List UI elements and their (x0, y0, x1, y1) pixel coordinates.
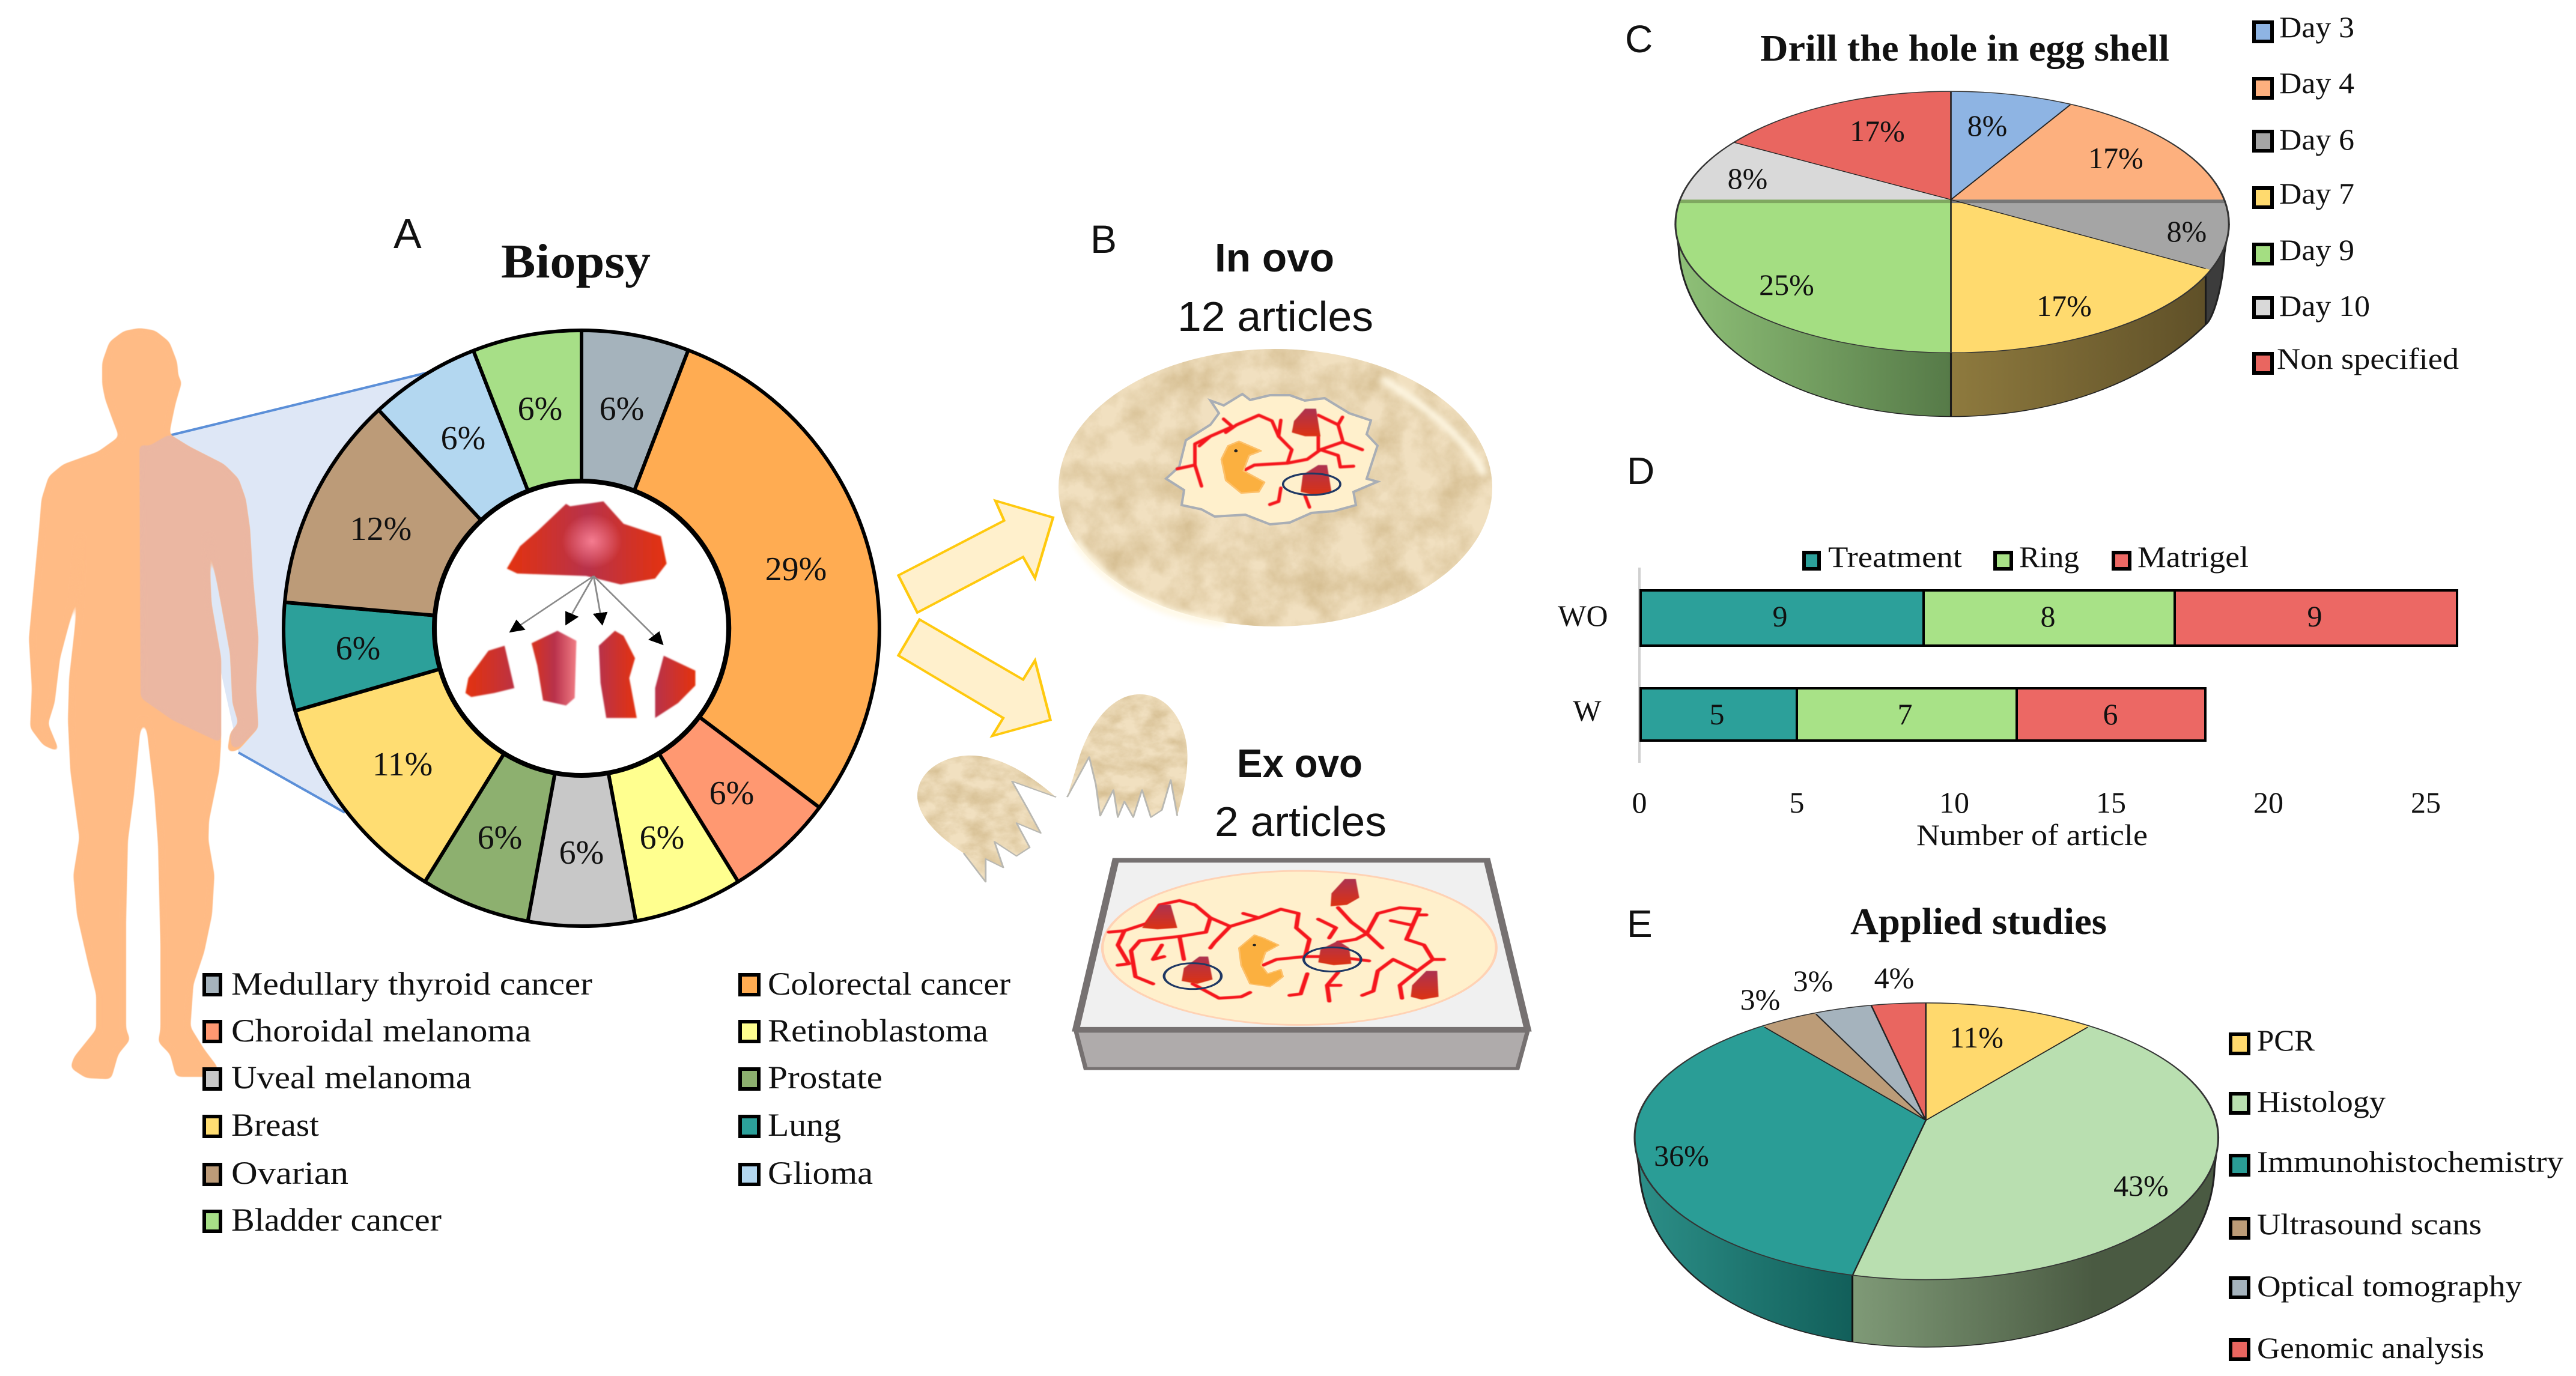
legend: drilling day: Day 9 (2279, 233, 2354, 267)
x axis tick labels: 5 (1789, 786, 1805, 819)
embryo (1239, 935, 1283, 987)
legend: tumour types: Breast (231, 1107, 319, 1143)
heading: Applied studies: Applied studies (1850, 902, 2107, 942)
legend: treatment, ring, matrigel: Ring (2019, 540, 2079, 574)
icon: human silhouette (29, 328, 258, 1079)
panel letter E: E (1627, 902, 1653, 945)
heading: In ovo: In ovo (1215, 235, 1334, 280)
pie percentage labels: 36% (1654, 1139, 1709, 1172)
icon: ex ovo culture dish (1076, 860, 1528, 1068)
legend: drilling day: Day 6 (2279, 123, 2354, 156)
donut percentage labels: 6% (518, 390, 562, 428)
legend: drilling day: Non specified (2277, 342, 2459, 375)
x axis tick labels: 10 (1939, 786, 1969, 819)
legend: tumour types: Ovarian (231, 1155, 348, 1191)
legend: tumour types: Medullary thyroid cancer (231, 966, 592, 1002)
icon: tumour divided into fragments (466, 502, 695, 718)
pie percentage labels: 25% (1759, 268, 1814, 302)
panel B: in ovo and ex ovo models (898, 217, 1528, 1068)
legend: treatment, ring, matrigel (1804, 540, 2249, 574)
bar value labels (1710, 599, 2322, 731)
egg rim highlight (1075, 378, 1484, 622)
arrow: to in ovo (898, 501, 1053, 613)
embryo, vessels and tumours (1177, 408, 1362, 507)
panel A: biopsy (29, 210, 1010, 1238)
category labels: WO (1558, 599, 1608, 632)
vessels (1109, 900, 1444, 1001)
donut percentage labels: 29% (765, 551, 827, 588)
pie percentage labels (1654, 961, 2169, 1202)
panel letter C: C (1625, 17, 1653, 61)
panel C: drill the hole in egg shell (1623, 10, 2459, 431)
donut percentage labels: 6% (559, 834, 604, 871)
panel letter D: D (1627, 449, 1654, 493)
pie percentage labels: 3% (1740, 983, 1780, 1016)
pie percentage labels: 17% (2037, 289, 2092, 323)
donut percentage labels: 6% (336, 630, 380, 667)
bar value labels: 5 (1710, 697, 1724, 731)
donut percentage labels: 6% (441, 420, 485, 457)
heading: Ex ovo: Ex ovo (1237, 741, 1362, 786)
silicone rings (1164, 947, 1361, 989)
pie percentage labels: 8% (2167, 214, 2207, 248)
arrow: to ex ovo (898, 619, 1050, 736)
legend: drilling day: Day 7 (2279, 177, 2354, 210)
bar: W (1641, 688, 2205, 741)
donut percentage labels: 11% (372, 746, 433, 783)
legend: treatment, ring, matrigel: Matrigel (2137, 540, 2249, 574)
bar chart axis line (1638, 568, 1641, 763)
pie percentage labels: 3% (1793, 964, 1833, 998)
text: 12 articles: 12 articles (1177, 293, 1373, 340)
x axis tick labels (1632, 786, 2441, 819)
donut percentage labels: 6% (640, 819, 684, 856)
dish top face (1076, 860, 1528, 1029)
legend: tumour types: Choroidal melanoma (231, 1013, 531, 1049)
donut percentage labels (336, 390, 827, 871)
bar value labels: 9 (2307, 599, 2322, 633)
tumours (1142, 879, 1439, 999)
panel D: stacked bar chart (1558, 449, 2457, 852)
x axis tick labels: 15 (2096, 786, 2126, 819)
x axis tick labels: 0 (1632, 786, 1647, 819)
legend: applied studies: Optical tomography (2257, 1269, 2522, 1303)
legend: tumour types: Lung (768, 1107, 841, 1143)
category labels (1558, 599, 1608, 727)
legend: tumour types: Bladder cancer (231, 1202, 442, 1238)
pie percentage labels: 4% (1874, 961, 1914, 995)
donut percentage labels: 6% (600, 390, 644, 428)
pie percentage labels: 43% (2113, 1169, 2169, 1202)
panel letter A: A (393, 210, 422, 257)
legend: applied studies: PCR (2257, 1023, 2315, 1057)
category labels: W (1573, 694, 1602, 727)
panel letter B: B (1090, 217, 1117, 261)
x axis title: Number of article (1916, 818, 2148, 852)
shell window (1166, 394, 1378, 524)
donut percentage labels: 6% (709, 775, 754, 812)
legend: drilling day: Day 4 (2279, 66, 2354, 100)
text: 2 articles: 2 articles (1215, 798, 1387, 845)
pie percentage labels: 17% (1850, 114, 1905, 148)
legend: drilling day: Day 10 (2279, 289, 2370, 323)
legend: applied studies: Immunohistochemistry (2257, 1145, 2563, 1178)
heading: Biopsy: Biopsy (501, 235, 651, 288)
legend: applied studies (2231, 1023, 2563, 1365)
chart: 3D pie of applied studies (1633, 1002, 2219, 1348)
legend: tumour types: Prostate (768, 1059, 882, 1096)
legend: treatment, ring, matrigel: Treatment (1828, 540, 1962, 574)
legend: tumour types: Glioma (768, 1155, 873, 1191)
legend: applied studies: Histology (2257, 1085, 2386, 1118)
x axis tick labels: 20 (2253, 786, 2283, 819)
pie percentage labels: 17% (2088, 141, 2143, 175)
legend: drilling day (2254, 10, 2459, 375)
heading: Drill the hole in egg shell: Drill the hole in egg shell (1760, 28, 2169, 69)
legend: drilling day: Day 3 (2279, 10, 2354, 44)
chart: tumour type donut (284, 330, 879, 926)
icon: in ovo egg with window (1059, 349, 1492, 626)
dish front face (1076, 1031, 1528, 1068)
legend: tumour types (204, 966, 1010, 1238)
bar value labels: 8 (2040, 599, 2056, 633)
bar value labels: 9 (1772, 599, 1788, 633)
legend: applied studies: Ultrasound scans (2257, 1207, 2482, 1241)
x axis tick labels: 25 (2411, 786, 2441, 819)
donut percentage labels: 6% (478, 819, 522, 856)
icon: broken egg shells (917, 694, 1188, 882)
legend: tumour types: Uveal melanoma (231, 1059, 472, 1096)
legend: tumour types: Colorectal cancer (768, 966, 1010, 1002)
donut percentage labels: 12% (350, 511, 412, 548)
bar: WO (1641, 590, 2457, 646)
chart: 3D pie of drilling day (1674, 91, 2230, 417)
pie percentage labels: 8% (1728, 162, 1767, 195)
egg shell (1059, 349, 1492, 626)
bar value labels: 6 (2103, 697, 2118, 731)
embryo membrane (1102, 871, 1496, 1025)
legend: applied studies: Genomic analysis (2257, 1331, 2484, 1365)
pie percentage labels (1728, 109, 2207, 323)
bar value labels: 7 (1897, 697, 1913, 731)
legend: tumour types: Retinoblastoma (768, 1013, 988, 1049)
panel E: applied studies (1592, 902, 2563, 1365)
pie percentage labels: 8% (1967, 109, 2007, 142)
pie percentage labels: 11% (1949, 1020, 2003, 1054)
magnification cone from body to chart (169, 372, 582, 813)
